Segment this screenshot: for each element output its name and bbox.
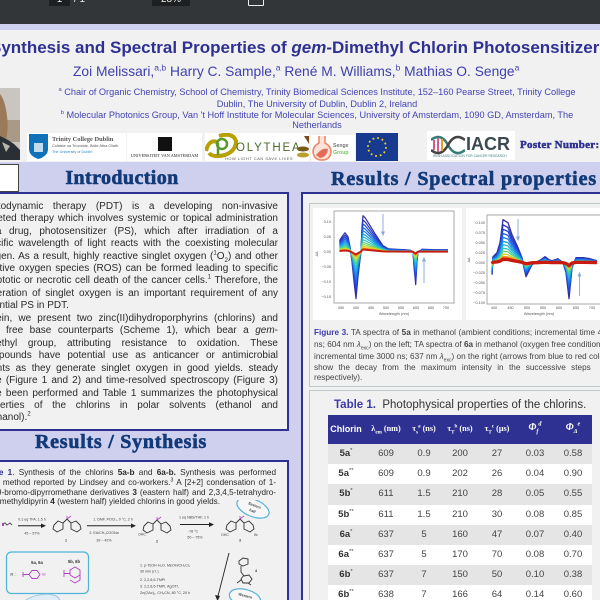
logo: Senge Group [311, 135, 355, 161]
table header [328, 415, 592, 444]
logo: Universiteit van Amsterdam [127, 133, 202, 161]
row 5b*: 28 [492, 488, 502, 499]
western half conditions: 30 min (r.t.) [140, 570, 159, 574]
TA decay curves [340, 216, 448, 299]
western half conditions [140, 564, 191, 595]
row 5a*: 27 [492, 448, 502, 459]
logo: IACR [427, 131, 515, 160]
x axis labels: 550 [540, 306, 546, 310]
figure box [309, 203, 600, 387]
table header: Chlorin [330, 424, 362, 434]
row 6b*: 150 [452, 569, 468, 580]
table header: τsa (ns) [412, 423, 436, 436]
heading: Results / Spectral properties: Results / Spectral properties [331, 168, 597, 190]
compound 1 [53, 516, 81, 542]
row 6a*: 160 [452, 529, 468, 540]
x axis labels: 400 [491, 306, 497, 310]
portrait photo [0, 88, 20, 160]
y axis labels: 0.05 [324, 235, 331, 239]
compound 2: OHC [138, 532, 146, 536]
row 6a*: 6a* [340, 529, 352, 540]
arrow 1: 0.1 eq TFA, 1.5 h [18, 518, 46, 522]
row 5a**: 0.04 [526, 468, 544, 479]
viewer toolbar [0, 0, 600, 24]
x axis labels: 550 [398, 306, 404, 310]
figure 3 left chart [313, 208, 462, 320]
row 6b*: 637 [378, 569, 394, 580]
table header: ΦΔe [566, 421, 580, 435]
table box [309, 390, 600, 600]
y axis labels [467, 221, 485, 305]
figure caption: respectively). [314, 373, 362, 382]
compound 4 [237, 558, 257, 585]
table header: λem (nm) [371, 424, 401, 436]
logo: Trinity College Dublin [27, 133, 126, 161]
western half conditions: 2. 2,2,6,6-TMPi [140, 578, 165, 582]
decay arrows [382, 214, 425, 283]
poster number: Poster Number: [520, 139, 599, 151]
Polythea side mark [297, 136, 309, 158]
row 6a*: 637 [378, 529, 394, 540]
x axis labels: 400 [353, 306, 359, 310]
row 5b**: 0.08 [526, 509, 544, 520]
arrow 3: -78 °C [188, 530, 199, 534]
row 5a*: 200 [452, 448, 468, 459]
y axis labels: −0.050 [473, 281, 485, 285]
row 5a*: 0.9 [417, 448, 431, 459]
toolbar page number [49, 0, 70, 6]
affiliation a line 2: Dublin, The University of Dublin, Dublin 2, Ireland [217, 98, 417, 108]
x axis labels: 450 [507, 306, 514, 310]
row 5a*: 0.03 [526, 448, 544, 459]
compound 3 [221, 516, 259, 542]
scheme text [0, 468, 276, 506]
row 6a*: 5 [421, 529, 427, 540]
UvA name: UNIVERSITEIT VAN AMSTERDAM [131, 153, 198, 158]
Polythea tagline: HOW LIGHT CAN SAVE LIVES [225, 156, 293, 161]
arrow 1 [18, 518, 46, 536]
row 5a*: 5a* [340, 448, 352, 459]
row 6b** [328, 585, 592, 600]
y axis labels: 0.000 [475, 261, 485, 265]
x axis labels: 600 [556, 306, 562, 310]
row 5b*: 5b* [339, 488, 353, 499]
row 5b*: 0.05 [526, 488, 544, 499]
row 6a*: 0.07 [526, 529, 544, 540]
x axis labels: 450 [368, 306, 374, 310]
R group box: Br [42, 572, 47, 576]
Senge text [333, 143, 349, 156]
arrow 2: 2. EA/CH₃COONa [89, 531, 119, 535]
callout: lower left [19, 591, 61, 600]
x axis labels: 700 [589, 306, 595, 310]
y axis labels: ΔA [315, 251, 319, 257]
row 6b*: 0.10 [526, 569, 544, 580]
callout: western half [227, 586, 263, 600]
row 6a** [328, 545, 592, 565]
toolbar zoom value [152, 0, 190, 6]
synthesis scheme [2, 500, 270, 600]
y axis labels: −0.100 [473, 301, 485, 305]
table header: Φfd [528, 421, 542, 435]
x axis labels: 650 [428, 306, 434, 310]
x axis labels: 600 [413, 306, 419, 310]
callout: eastern half: half [249, 508, 257, 514]
row 5b**: 30 [492, 509, 502, 520]
affiliation b line 2: Netherlands [292, 120, 342, 130]
row 5a** [328, 464, 592, 484]
arrow 2: 39 – 42% [96, 538, 112, 542]
logo: Polythea [205, 133, 309, 161]
Trinity subtitle: Coláiste na Tríonóide, Baile Átha Cliath [52, 144, 118, 148]
y axis labels: −0.025 [473, 271, 485, 275]
UvA emblem [158, 137, 172, 151]
panel: spectral properties [301, 192, 600, 600]
row 6a**: 170 [452, 549, 468, 560]
row 5b* [328, 484, 592, 505]
arrow 2: 1. DMF, POCl₃, 0 °C, 2 h [93, 518, 133, 522]
compound 4: 4 [255, 569, 257, 573]
row 6b*: 7 [421, 569, 427, 580]
EU stars [367, 137, 387, 157]
compound 2 [138, 517, 171, 544]
row 6a**: 6a** [338, 549, 354, 560]
y axis labels: 0.025 [475, 251, 485, 255]
Senge text: Group [333, 150, 349, 156]
x axis labels: Wavelength (nm) [524, 311, 555, 316]
row 5b*: 210 [452, 488, 468, 499]
Polythea emblem [205, 133, 238, 158]
row 6a* [328, 525, 592, 545]
figure caption: ns; 604 nm λexc) on the left; TA spectra of 6a in methanol (oxygen free conditions; [314, 340, 600, 352]
row 5a**: 26 [492, 468, 502, 479]
compound 3: Br [254, 533, 259, 537]
x axis labels: 350 [338, 306, 344, 310]
row 6b*: 50 [492, 569, 502, 580]
IACR wordmark: IACR [466, 134, 510, 154]
y axis labels [315, 220, 331, 299]
row 6b* [328, 565, 592, 585]
x axis labels: 500 [383, 306, 389, 310]
toolbar icons [248, 0, 264, 6]
compound 2: 2 [156, 540, 158, 544]
compound 3: OHC [221, 533, 229, 537]
y axis labels: −0.05 [321, 265, 331, 269]
compound 1: 1 [65, 538, 67, 542]
western half conditions: Zn(OAc)₂, CH₃CN, 80 °C, 20 h [140, 591, 190, 595]
row 5a**: 5a** [338, 468, 354, 479]
row 5b**: 0.85 [564, 509, 582, 520]
row 5b*: 0.55 [564, 488, 582, 499]
row 5b** [328, 505, 592, 525]
panel: introduction [0, 192, 289, 431]
IACR subtitle: IRISH ASSOCIATION FOR CANCER RESEARCH [433, 154, 507, 158]
row 5b**: 611 [378, 509, 394, 520]
Senge flask [312, 136, 332, 161]
row 5a**: 0.90 [564, 468, 582, 479]
row 5a*: 0.58 [564, 448, 582, 459]
Senge text: Senge [333, 143, 349, 149]
arrow 2 [87, 518, 136, 542]
heading: Introduction: Introduction [65, 167, 179, 189]
figure caption: show the decay from the maximum intensity in the successive steps [314, 363, 591, 372]
x axis labels: 700 [443, 306, 449, 310]
heading: Results / Synthesis: Results / Synthesis [35, 431, 207, 453]
decay arrows [517, 219, 581, 296]
x axis labels: Wavelength (nm) [379, 311, 410, 316]
figure 3 right chart [466, 208, 600, 320]
row 5b*: 1.5 [417, 488, 431, 499]
y axis labels: 0.075 [475, 231, 485, 235]
TA decay curves [492, 220, 597, 299]
table title: Table 1. Photophysical properties of the chlorins. [334, 399, 586, 411]
R group box: 5a, 6a [31, 560, 43, 565]
row 6a**: 70 [492, 549, 502, 560]
IACR DNA helix [431, 136, 465, 154]
x axis labels: 650 [573, 306, 579, 310]
row 6b*: 0.38 [564, 569, 582, 580]
row 6a**: 637 [378, 549, 394, 560]
intro text [0, 201, 278, 423]
Trinity name: Trinity College Dublin [52, 136, 113, 143]
aldehyde reactant [2, 523, 12, 526]
y axis labels: 0.050 [475, 241, 485, 245]
row 5a**: 202 [452, 468, 468, 479]
arrow 1: 45 – 57% [24, 532, 40, 536]
row 5a*: 609 [378, 448, 394, 459]
table header: τTb (ns) [447, 423, 473, 436]
Trinity university: The University of Dublin [52, 150, 92, 154]
poster number box [0, 164, 19, 192]
callout: eastern half [234, 494, 272, 522]
x axis labels: 500 [524, 306, 530, 310]
western half conditions: 1. p-TsOH·H₂O, MeOH/CH₂Cl₂ [140, 564, 191, 568]
compound 3: 3 [239, 538, 241, 542]
row 6a*: 47 [492, 529, 502, 540]
header band [0, 30, 600, 162]
y axis labels: −0.10 [321, 280, 331, 284]
arrow 3 [179, 516, 214, 540]
callout: eastern half: Eastern [248, 501, 261, 510]
y axis labels: ΔA [467, 257, 471, 263]
y axis labels: −0.075 [473, 291, 485, 295]
Trinity shield [29, 134, 48, 159]
figure caption [314, 328, 600, 382]
R group box: 5b, 6b [68, 559, 80, 564]
y axis labels: −0.15 [321, 295, 331, 299]
callout: western half: Western [238, 592, 253, 600]
row 6b*: 6b* [339, 569, 353, 580]
row 5b*: 611 [378, 488, 394, 499]
y axis labels: 0.100 [475, 221, 485, 225]
row 5a* [328, 444, 592, 464]
x axis labels [491, 306, 595, 316]
affiliation a: a Chair of Organic Chemistry, School of Chemistry, Trinity Biomedical Sciences Institute, 152–160 Pearse Street, Trinity College [58, 86, 576, 96]
x axis labels [338, 306, 449, 316]
row 6a**: 0.08 [526, 549, 544, 560]
y axis labels: 0.00 [324, 250, 331, 254]
row 6a**: 0.70 [564, 549, 582, 560]
row 5a**: 0.9 [417, 468, 431, 479]
panel: synthesis [0, 460, 289, 600]
row 5a**: 609 [378, 468, 394, 479]
y axis labels: 0.10 [324, 220, 331, 224]
table header: τTc (μs) [485, 423, 509, 436]
row 6a**: 5 [421, 549, 427, 560]
western half conditions: 3. 2,2,6,6-TMPi, AgOTf, [140, 584, 179, 588]
R group box: R : [10, 572, 16, 577]
row 5b**: 210 [452, 509, 468, 520]
row 6a*: 0.40 [564, 529, 582, 540]
row 5b**: 5b** [338, 508, 354, 520]
Polythea name: OLYTHEA [236, 142, 301, 154]
authors: Zoi Melissari,a,b Harry C. Sample,a René M. Williams,b Mathias O. Sengea [73, 62, 519, 79]
R group box [6, 552, 88, 594]
row 5b**: 1.5 [417, 509, 431, 520]
arrow down [215, 553, 229, 600]
arrow 3: 50 – 75% [187, 536, 203, 540]
affiliation b: b Molecular Photonics Group, Van 't Hoff Institute for Molecular Sciences, University of Amsterdam, 1090 GD, Amsterdam, The [61, 109, 573, 120]
logo: EU flag [356, 133, 398, 161]
arrow 3: 1 eq NBS/THF, 1 h [179, 516, 209, 520]
